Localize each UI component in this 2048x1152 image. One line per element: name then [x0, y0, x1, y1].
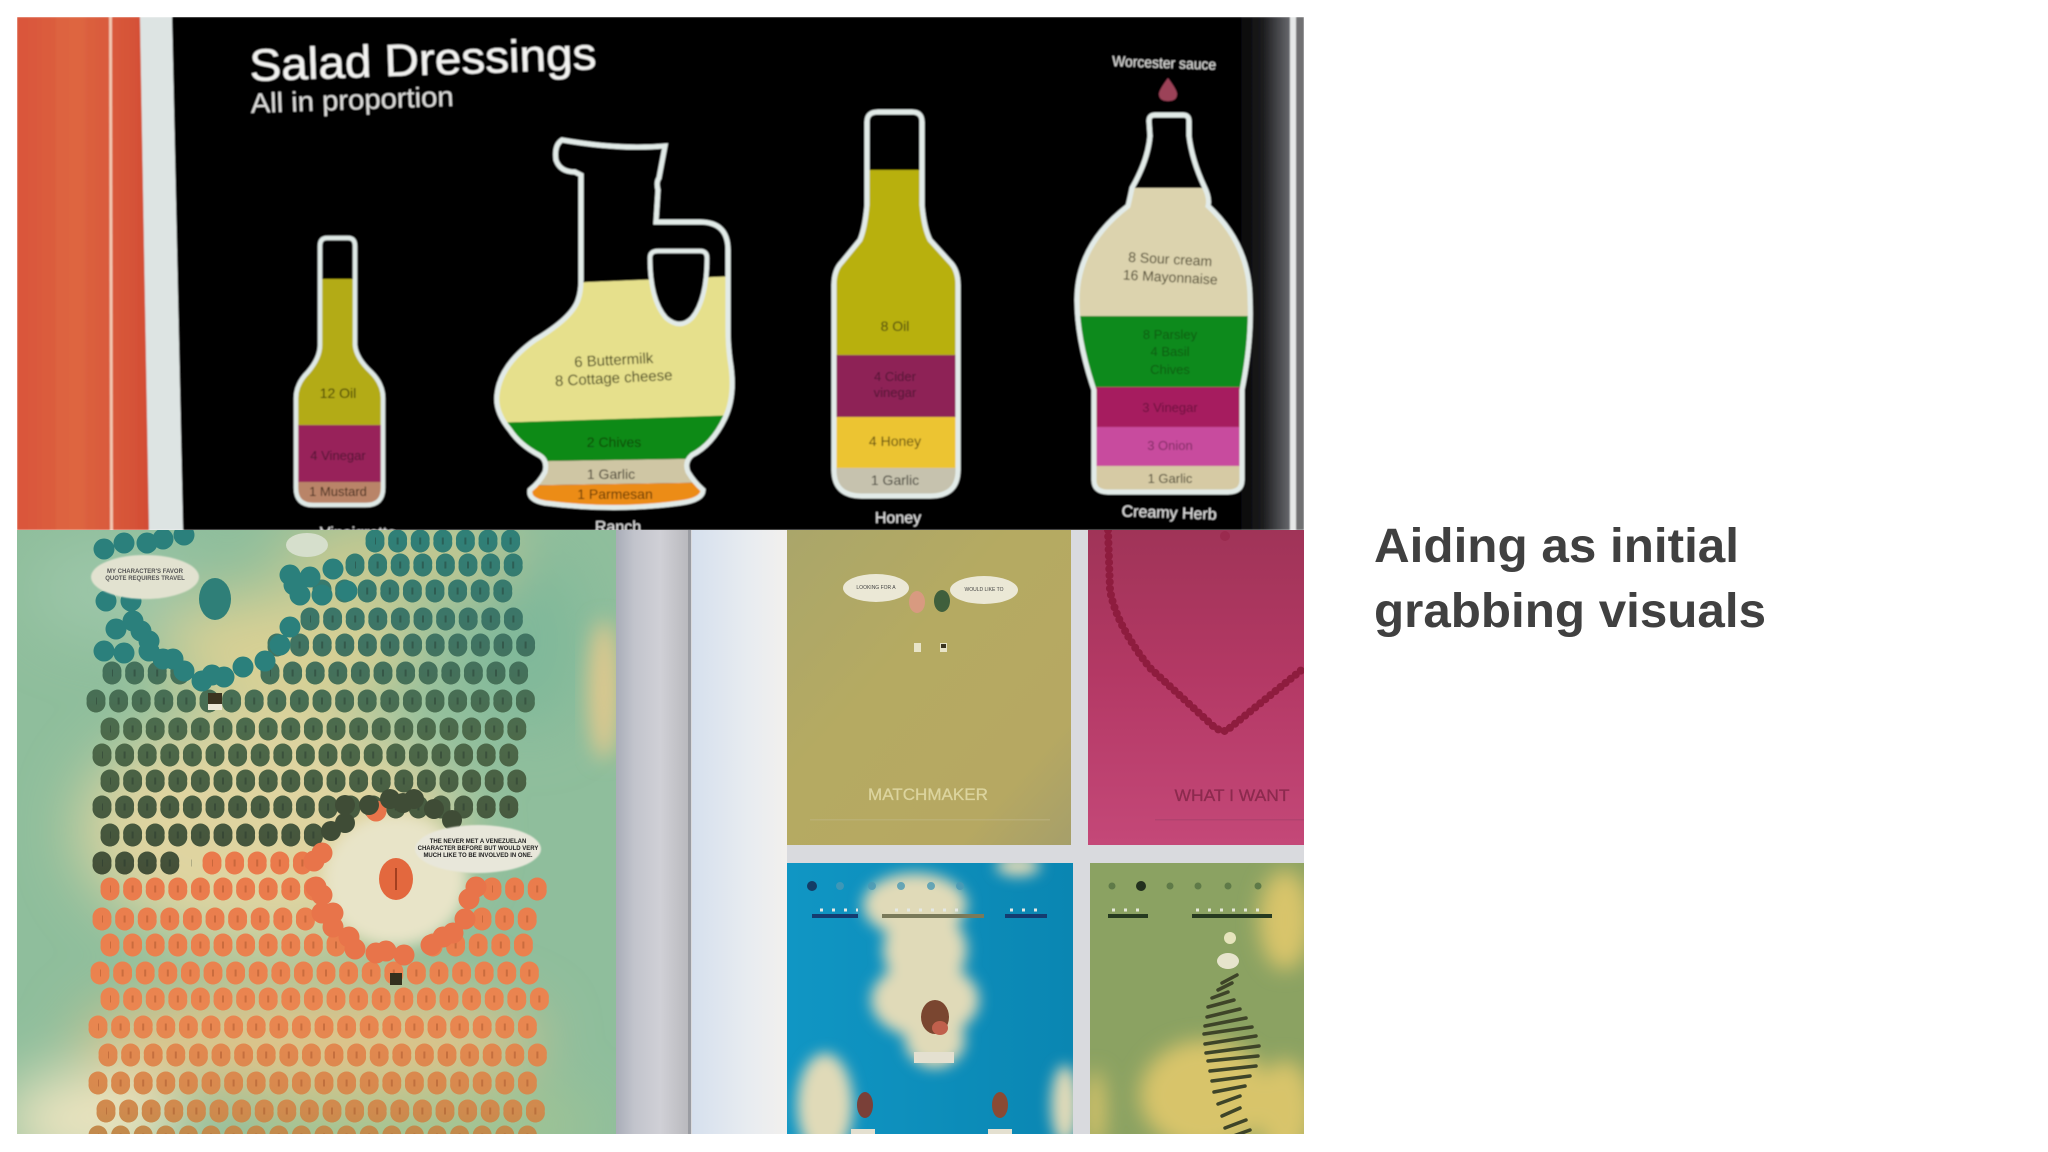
- small captions: [208, 693, 402, 985]
- white poster margin: [140, 17, 184, 530]
- teal balloon clusters: [104, 535, 347, 681]
- bottle: honey: 4 Cider: [874, 369, 917, 384]
- icon row: [807, 881, 960, 891]
- what i want title: WHAT I WANT: [1174, 786, 1290, 805]
- green balloons: [96, 539, 537, 867]
- panel: matchmaker: [787, 530, 1071, 845]
- heart shaped clearing: [323, 814, 467, 946]
- bottle: ranch: Ranch: [595, 519, 641, 536]
- caption line: [810, 819, 1050, 820]
- bottle: vinaigrette: 4 Vinegar: [310, 448, 366, 463]
- bottle: honey: vinegar: [874, 385, 917, 400]
- bottle: creamy herb: 3 Onion: [1147, 438, 1193, 453]
- yellow clouds: [1085, 870, 1313, 1152]
- tiny icons: [914, 643, 947, 652]
- bottle: vinaigrette: [290, 238, 396, 542]
- bottle: honey: [825, 112, 965, 527]
- bottle: ranch: 2 Chives: [587, 434, 641, 450]
- speech bubble left: QUOTE REQUIRES TRAVEL: [105, 576, 185, 582]
- icon: worcester sauce drop: [1159, 78, 1177, 101]
- orange balloons: [98, 861, 542, 1141]
- jug handle opening: [650, 251, 707, 324]
- photo: salad dressings poster: [17, 17, 1304, 542]
- bottle: ranch: [490, 140, 740, 536]
- speech bubble left: MY CHARACTER'S FAVOR: [107, 569, 184, 575]
- panel: what i want: [1088, 530, 1305, 845]
- bottle: ranch: 6 Buttermilk: [574, 350, 654, 371]
- orange balloon figures: [98, 863, 542, 1137]
- heart specimen: [921, 1000, 949, 1035]
- green balloon figures: [96, 541, 537, 863]
- right edge cloud: [588, 620, 620, 760]
- large orange balloon: [379, 858, 413, 900]
- poster right edge: [1290, 17, 1304, 530]
- bottle: honey: 8 Oil: [881, 318, 909, 334]
- photo: balloon poster: [0, 520, 620, 1152]
- title: Salad Dressings: [249, 28, 597, 91]
- bottle: creamy herb: [1070, 115, 1260, 524]
- dna helix: [1204, 975, 1259, 1138]
- speech bubble top: [286, 533, 328, 557]
- bottle: vinaigrette: 1 Mustard: [309, 484, 367, 499]
- worcester sauce label: Worcester sauce: [1112, 53, 1216, 74]
- bottle: vinaigrette: Vinaigrette: [320, 525, 396, 542]
- dark balloons at heart top: [331, 799, 452, 831]
- orange wall strip: [17, 17, 150, 530]
- heart top bead: [1220, 531, 1230, 541]
- black poster background: [172, 17, 1292, 530]
- speech bubbles: LOOKING FOR A: [856, 585, 896, 591]
- bottle: creamy herb: 8 Parsley: [1143, 327, 1198, 342]
- sky clouds: [17, 530, 577, 1134]
- caption line: [1155, 819, 1305, 820]
- matchmaker title: MATCHMAKER: [868, 785, 988, 804]
- speech bubble right: THE NEVER MET A VENEZUELAN: [430, 839, 526, 845]
- bottle: creamy herb: 4 Basil: [1150, 344, 1190, 359]
- heading second line: grabbing visuals: [1374, 585, 1766, 638]
- bottle: honey: 1 Garlic: [871, 472, 919, 488]
- bottle: honey: 4 Honey: [869, 433, 921, 449]
- panel: blue clouds: [787, 856, 1079, 1152]
- circle and label: [1217, 932, 1239, 969]
- bottle: ranch: 1 Garlic: [587, 466, 635, 482]
- bottle: ranch: 8 Cottage cheese: [555, 367, 673, 390]
- dark icon: [1136, 881, 1146, 891]
- speech bubbles: [843, 574, 1018, 604]
- poster right shading: [1241, 17, 1290, 530]
- book page: [690, 530, 1304, 1134]
- timelines: [1108, 910, 1272, 918]
- poster sky background: [17, 530, 616, 1134]
- balloons around heart clearing: [314, 811, 476, 955]
- page left margin: [692, 530, 787, 1134]
- bottle: creamy herb: Chives: [1150, 362, 1190, 377]
- speech bubbles: WOULD LIKE TO: [964, 587, 1004, 593]
- subtitle: All in proportion: [250, 81, 454, 119]
- panel: green dna: [1085, 863, 1313, 1152]
- bottle: creamy herb: 16 Mayonnaise: [1122, 267, 1218, 287]
- bottle: creamy herb: 8 Sour cream: [1128, 249, 1213, 269]
- speech bubble right: MUCH LIKE TO BE INVOLVED IN ONE.: [423, 853, 533, 859]
- bottle: creamy herb: 1 Garlic: [1148, 471, 1193, 486]
- bottle: honey: Honey: [875, 510, 921, 527]
- bottle: creamy herb: Creamy Herb: [1121, 503, 1217, 524]
- photo: book gutter: [616, 530, 690, 1134]
- icon row: [1112, 882, 1258, 890]
- large teal balloon: [199, 578, 231, 620]
- specimen labels: [851, 1052, 1012, 1137]
- two balloons: [909, 590, 950, 613]
- timelines: [812, 910, 1047, 918]
- heading: Aiding as initial: [1374, 520, 1739, 573]
- gutter line: [688, 530, 691, 1134]
- small specimens: [857, 1092, 1008, 1118]
- speech bubble right: CHARACTER BEFORE BUT WOULD VERY: [418, 846, 538, 852]
- bottle: vinaigrette: 12 Oil: [320, 385, 356, 401]
- clouds: [797, 856, 1079, 1152]
- speech bubble left: [91, 555, 199, 599]
- bottle: ranch: 1 Parmesan: [577, 486, 653, 502]
- speech bubble right: [415, 825, 541, 873]
- heart of beads: [1108, 530, 1304, 731]
- bottle: creamy herb: 3 Vinegar: [1142, 400, 1198, 415]
